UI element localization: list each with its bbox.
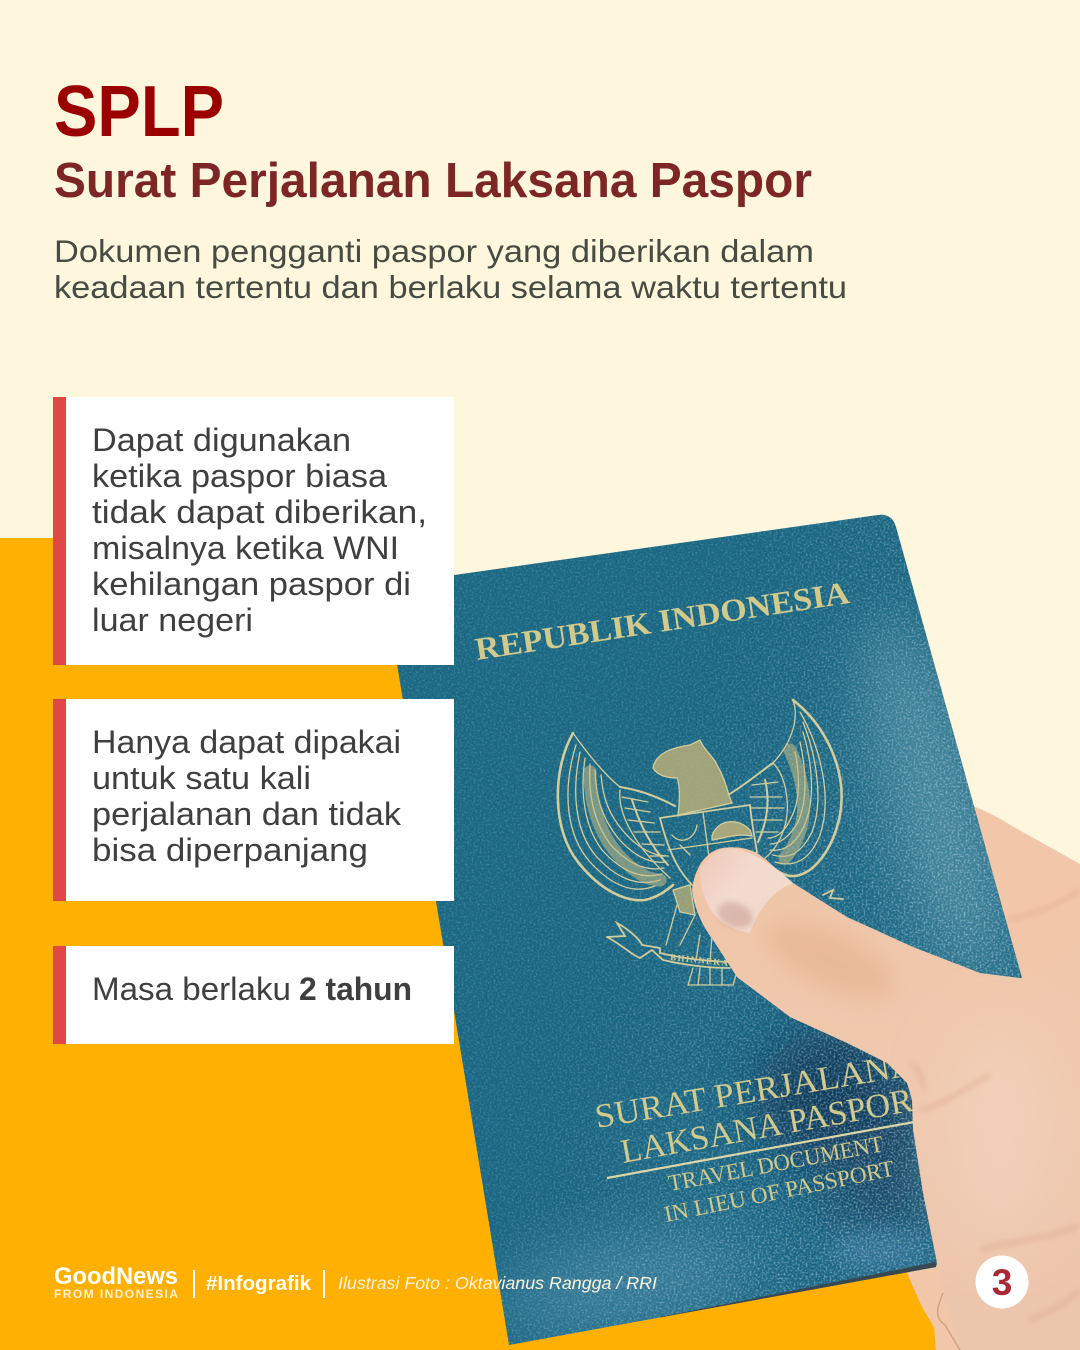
card 2 text [92, 724, 402, 868]
thumb nail [700, 848, 793, 933]
description: keadaan tertentu dan berlaku selama waktu tertentu [54, 269, 847, 305]
subtitle: Surat Perjalanan Laksana Paspor [54, 154, 812, 208]
hand and thumb [692, 847, 1080, 1350]
card 1 text [92, 422, 427, 638]
tail and legs [666, 885, 843, 985]
footer [54, 1263, 657, 1301]
head and neck [653, 740, 732, 815]
card 2 text: perjalanan dan tidak [92, 796, 402, 832]
page number: 3 [992, 1262, 1012, 1303]
card 2 text: untuk satu kali [92, 760, 311, 796]
cover text: Republik Indonesia: REPUBLIK INDONESIA [473, 574, 852, 667]
card 3 [53, 946, 454, 1044]
nail bed [714, 898, 756, 932]
hashtag: #Infografik [206, 1273, 312, 1295]
page number [976, 1256, 1028, 1308]
card 1 text: Dapat digunakan [92, 422, 351, 458]
finger crease [1008, 890, 1080, 920]
card 1 [53, 397, 454, 665]
skin tone on thumb [755, 905, 905, 1015]
card 1 text: misalnya ketika WNI [92, 530, 399, 566]
shield [660, 805, 757, 895]
back of hand behind passport [907, 805, 1080, 1350]
card 1 text: ketika paspor biasa [92, 458, 388, 494]
garuda emblem [558, 700, 843, 985]
description: Dokumen pengganti paspor yang diberikan dalam [54, 233, 814, 269]
card 2 text: Hanya dapat dipakai [92, 724, 401, 760]
cover text: Laksana Paspor: LAKSANA PASPOR [618, 1082, 916, 1171]
description [54, 233, 847, 305]
knuckle crease [912, 1065, 990, 1110]
passport lighting [380, 500, 1040, 1350]
cover text: Surat Perjalanan: SURAT PERJALANAN [592, 1042, 944, 1136]
card 3 text: 2 tahun [299, 971, 412, 1007]
card 3 text [92, 971, 412, 1007]
card 2 [53, 699, 454, 901]
card 1 text: luar negeri [92, 602, 253, 638]
cover rule [607, 1120, 925, 1178]
yellow background shape [0, 538, 936, 1350]
card 3 text: Masa berlaku [92, 971, 291, 1007]
photo credit: Ilustrasi Foto : Oktavianus Rangga / RRI [338, 1273, 657, 1293]
ribbon [607, 923, 730, 968]
thumb and palm [692, 847, 1080, 1350]
right wing [728, 700, 842, 876]
card 2 text: bisa diperpanjang [92, 832, 368, 868]
logo: FROM INDONESIA [54, 1287, 178, 1301]
palm fold [938, 1293, 960, 1350]
card 1 text: kehilangan paspor di [92, 566, 411, 602]
lower hand lines [980, 1225, 1080, 1320]
logo: GoodNews [54, 1263, 178, 1290]
left wing [558, 733, 675, 900]
cover text: Travel Document: TRAVEL DOCUMENT [666, 1131, 885, 1196]
skin highlight [945, 1020, 1055, 1240]
passport cover [384, 515, 1022, 1345]
passport photo [380, 500, 1040, 1350]
title: SPLP [54, 72, 224, 152]
ribbon: BHINNEKA [670, 952, 729, 968]
cover text: In lieu of passport: IN LIEU OF PASSPORT [662, 1156, 896, 1227]
card 1 text: tidak dapat diberikan, [92, 494, 427, 530]
